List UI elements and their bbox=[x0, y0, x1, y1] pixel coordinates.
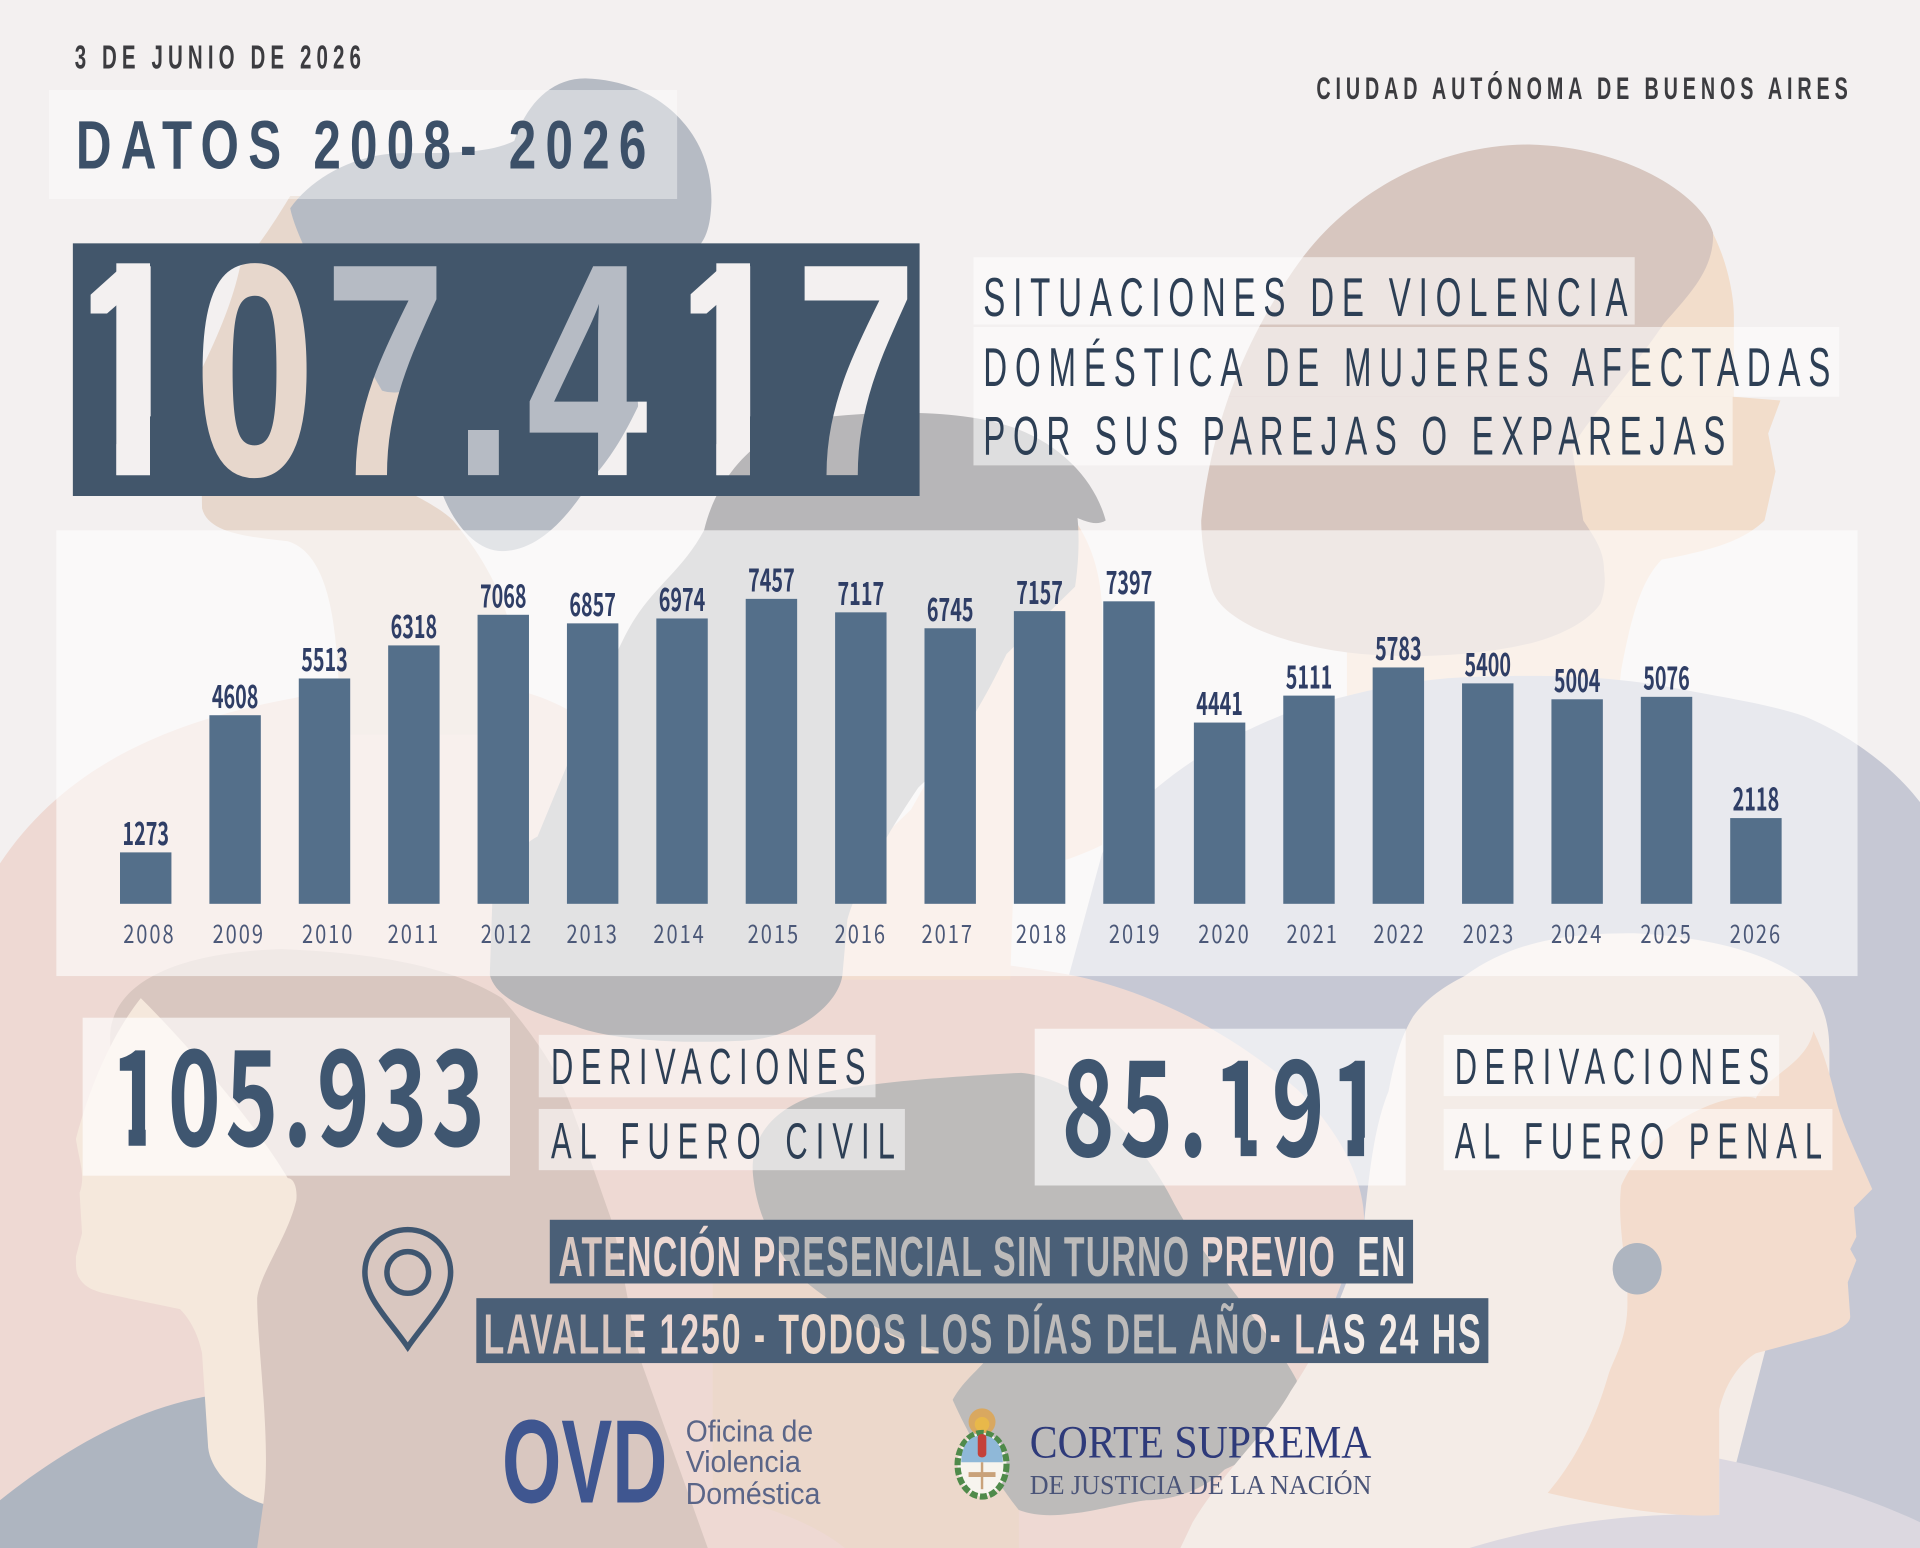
value labels: 5400 bbox=[1464, 639, 1511, 686]
year labels: 2009 bbox=[213, 914, 265, 951]
year labels bbox=[123, 914, 1782, 951]
year labels: 2021 bbox=[1286, 914, 1339, 951]
value labels: 5513 bbox=[301, 634, 348, 681]
value labels: 5076 bbox=[1643, 652, 1690, 699]
stat: derivaciones fuero civil: AL FUERO CIVIL bbox=[551, 1112, 895, 1169]
heading: datos 2008-2026 bbox=[49, 90, 677, 199]
value labels: 6974 bbox=[659, 574, 705, 621]
stat: derivaciones fuero penal: 85.191 bbox=[1062, 1003, 1383, 1195]
stat: derivaciones fuero penal: AL FUERO PENAL bbox=[1455, 1112, 1822, 1169]
location: CIUDAD AUTÓNOMA DE BUENOS AIRES bbox=[1316, 70, 1848, 106]
year labels: 2013 bbox=[566, 914, 619, 951]
year labels: 2011 bbox=[388, 914, 440, 951]
year labels: 2017 bbox=[922, 914, 974, 951]
logo: OVD: Oficina de bbox=[686, 1414, 813, 1448]
heading: datos 2008-2026: DATOS 2008- 2026 bbox=[76, 106, 646, 183]
logo: OVD: OVD bbox=[502, 1396, 667, 1529]
year labels: 2019 bbox=[1109, 914, 1161, 951]
icon: national coat of arms bbox=[958, 1408, 1007, 1497]
date: 3 DE JUNIO DE 2026 bbox=[75, 39, 361, 76]
value labels: 5111 bbox=[1286, 651, 1332, 698]
bars bbox=[120, 599, 1782, 904]
year labels: 2012 bbox=[481, 914, 533, 951]
logo: OVD: Violencia bbox=[686, 1445, 802, 1479]
year labels: 2020 bbox=[1198, 914, 1251, 951]
value labels: 2118 bbox=[1733, 773, 1779, 820]
banner: atención presencial bbox=[550, 1220, 1413, 1283]
stat: derivaciones fuero penal: DERIVACIONES bbox=[1455, 1038, 1769, 1095]
value labels: 7397 bbox=[1106, 557, 1152, 604]
year labels: 2008 bbox=[123, 914, 176, 951]
total figure: 107.417 knocked out of dark panel bbox=[73, 243, 920, 496]
value labels: 4608 bbox=[212, 671, 258, 717]
value labels: 5004 bbox=[1554, 655, 1600, 702]
value labels: 7457 bbox=[748, 554, 795, 601]
value labels: 6745 bbox=[927, 584, 973, 631]
value labels: 6318 bbox=[391, 601, 437, 648]
year labels: 2014 bbox=[653, 914, 706, 951]
value labels bbox=[122, 554, 1779, 855]
description: situaciones de violencia: DOMÉSTICA DE MUJERES AFECTADAS bbox=[983, 336, 1830, 398]
stat: derivaciones fuero penal bbox=[1034, 1028, 1832, 1186]
year labels: 2024 bbox=[1551, 914, 1603, 951]
description: situaciones de violencia bbox=[973, 257, 1839, 466]
logo: Corte Suprema: DE JUSTICIA DE LA NACIÓN bbox=[1030, 1470, 1371, 1500]
year labels: 2015 bbox=[748, 914, 800, 951]
year labels: 2010 bbox=[302, 914, 354, 951]
value labels: 6857 bbox=[569, 579, 616, 626]
stat: derivaciones fuero civil: 105.933 bbox=[110, 992, 485, 1184]
year labels: 2018 bbox=[1016, 914, 1068, 951]
year labels: 2023 bbox=[1463, 914, 1515, 951]
banner: lavalle 1250 bbox=[476, 1298, 1488, 1363]
value labels: 7157 bbox=[1016, 567, 1063, 613]
description: situaciones de violencia: POR SUS PAREJAS O EXPAREJAS bbox=[983, 405, 1725, 466]
value labels: 4441 bbox=[1196, 678, 1243, 725]
logo: Corte Suprema bbox=[1030, 1417, 1372, 1500]
value labels: 1273 bbox=[122, 808, 169, 855]
bar chart: situaciones por año bbox=[56, 530, 1858, 976]
value labels: 7117 bbox=[838, 568, 884, 615]
year labels: 2016 bbox=[835, 914, 887, 951]
logo: Corte Suprema: CORTE SUPREMA bbox=[1030, 1417, 1372, 1468]
value labels: 7068 bbox=[480, 570, 527, 617]
year labels: 2022 bbox=[1373, 914, 1426, 951]
year labels: 2026 bbox=[1730, 914, 1782, 951]
description: situaciones de violencia: SITUACIONES DE VIOLENCIA bbox=[983, 266, 1628, 328]
value labels: 5783 bbox=[1375, 623, 1422, 670]
icon: location pin bbox=[365, 1230, 451, 1347]
stat: derivaciones fuero civil bbox=[82, 1018, 905, 1176]
logo: OVD: Doméstica bbox=[686, 1477, 821, 1511]
year labels: 2025 bbox=[1640, 914, 1693, 951]
stat: derivaciones fuero civil: DERIVACIONES bbox=[551, 1038, 865, 1095]
